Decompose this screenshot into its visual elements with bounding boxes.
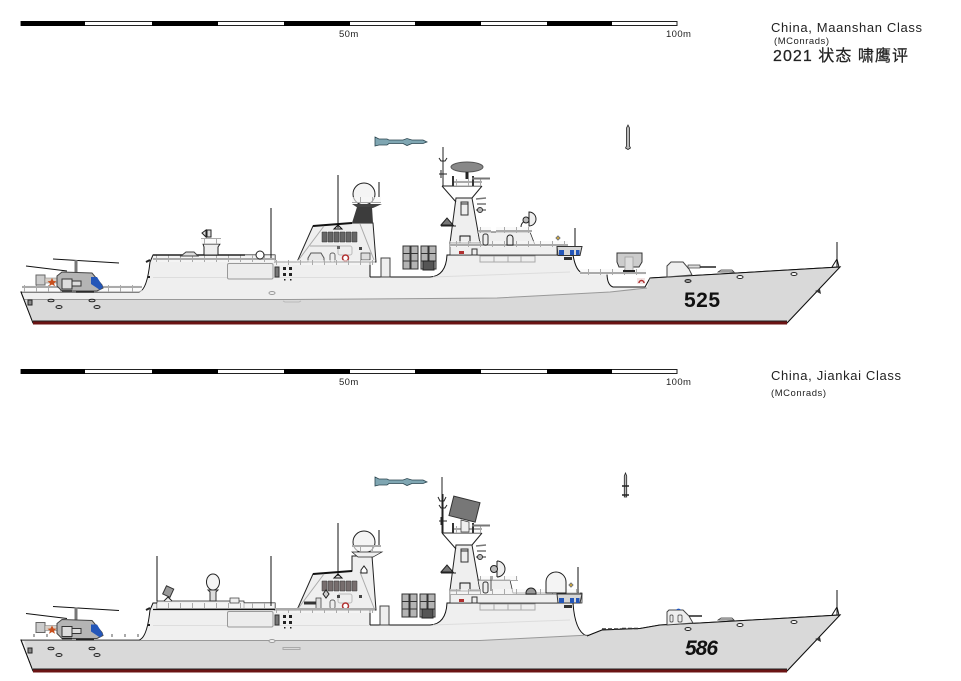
main gun	[667, 262, 716, 277]
main mast with planar radar	[438, 477, 490, 592]
surface-to-air missile	[626, 125, 630, 150]
aft deckhouse with radome	[153, 556, 292, 628]
title: Maanshan class	[771, 20, 922, 65]
title: Maanshan class: China, Maanshan Class	[771, 20, 922, 35]
surface-to-air missile	[622, 473, 629, 497]
scale bar: Jiankai	[21, 369, 691, 388]
helicopter	[26, 259, 119, 292]
hull number 525: 525	[684, 289, 720, 312]
scale bar: Jiankai: 100m	[666, 377, 691, 388]
ship: Jiankai class corvette	[21, 477, 840, 672]
bow fittings	[685, 242, 839, 294]
cruise missile	[375, 137, 427, 146]
hull	[21, 603, 840, 672]
stern fittings	[22, 608, 640, 656]
aft deckhouse	[153, 208, 292, 280]
title: Jiankai class	[771, 368, 902, 399]
title: Maanshan class: 2021 状态 啸鹰评	[773, 47, 908, 65]
scale bar: Maanshan: 50m	[339, 29, 359, 40]
scale bar: Jiankai: 50m	[339, 377, 359, 388]
helicopter	[26, 606, 119, 640]
forward deckhouse with radome	[275, 523, 382, 613]
scale bar: Maanshan: 100m	[666, 29, 691, 40]
title: Maanshan class: (MConrads)	[774, 36, 829, 47]
ship: Maanshan class frigate	[21, 147, 840, 324]
missile launchers	[381, 246, 436, 277]
missile launchers	[380, 594, 435, 625]
main mast	[439, 147, 490, 245]
title: Jiankai class: (MConrads)	[771, 388, 826, 399]
stern fittings	[22, 260, 301, 308]
bow fittings	[685, 590, 839, 642]
forward deckhouse with radome	[275, 175, 382, 265]
title: Jiankai class: China, Jiankai Class	[771, 368, 902, 383]
foredeck launcher	[580, 253, 646, 284]
hull number 586: 586	[685, 637, 718, 660]
scale bar: Maanshan	[21, 21, 691, 40]
hull	[21, 255, 840, 324]
bow gun	[667, 609, 702, 625]
midships deckhouse	[450, 561, 582, 610]
cruise missile	[375, 477, 427, 486]
midships deckhouse	[450, 212, 582, 262]
